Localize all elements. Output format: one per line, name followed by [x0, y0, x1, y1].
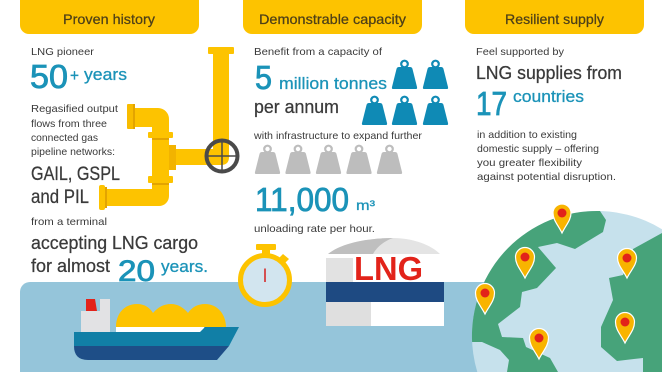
- heading: demonstrable capacity: [243, 0, 422, 34]
- text: in addition: you greater flexibility: [477, 157, 583, 169]
- icon: LNG tank: [326, 238, 444, 326]
- text: LNG pioneer: LNG pioneer: [31, 46, 95, 58]
- label: LNG: LNG: [354, 250, 423, 287]
- text: from a terminal: from a terminal: [31, 216, 107, 228]
- icon: valve wheel: [206, 140, 238, 172]
- stat: almost 20 years: for almost: [31, 256, 110, 276]
- panel: proven history: [20, 0, 238, 288]
- icons: blue weights: [362, 61, 448, 125]
- heading: proven history: [20, 0, 199, 34]
- text: regasified output: Regasified output: [31, 103, 118, 115]
- text: regasified output: connected gas: [31, 132, 98, 144]
- text: unloading rate: unloading rate per hour.: [254, 223, 375, 235]
- stat: 5 million tonnes per annum: million tonnes: [279, 74, 387, 93]
- text: feel supported: Feel supported by: [476, 46, 565, 58]
- icon: LNG ship: [74, 299, 239, 360]
- text: pipeline names: [31, 164, 120, 208]
- panel: demonstrable capacity: [243, 0, 448, 235]
- globe: [472, 211, 662, 372]
- icons: grey weights: [255, 146, 402, 174]
- stat: 5 million tonnes per annum: 5: [255, 59, 272, 96]
- icon: pipeline: [99, 47, 234, 210]
- stat: almost 20 years: 20: [118, 255, 155, 288]
- text: LNG supplies from: LNG supplies from: [476, 62, 622, 83]
- panel: resilient supply: [465, 0, 644, 183]
- text: with infrastructure: with infrastructure to expand further: [253, 130, 423, 142]
- text: benefit: Benefit from a capacity of: [254, 46, 382, 58]
- text: regasified output: [31, 103, 118, 158]
- text: regasified output: pipeline networks:: [31, 146, 115, 158]
- text: in addition: [477, 129, 616, 183]
- sea background: [20, 282, 500, 372]
- stat: almost 20 years: [31, 233, 208, 288]
- location pins: [476, 204, 636, 359]
- stat: 5 million tonnes per annum: [254, 59, 387, 117]
- text: pipeline names: GAIL, GSPL: [31, 164, 120, 185]
- stat: 11,000 m3: 11,000: [255, 181, 349, 218]
- heading: demonstrable capacity: Demonstrable capacity: [259, 11, 406, 27]
- heading: resilient supply: [465, 0, 644, 34]
- stat: 5 million tonnes per annum: per annum: [254, 97, 339, 117]
- text: in addition: against potential disruption.: [477, 171, 616, 183]
- heading: proven history: Proven history: [63, 11, 155, 27]
- stat: 17 countries: countries: [513, 87, 584, 106]
- stat: 17 countries: 17: [476, 85, 507, 122]
- stat: 11,000 m3: m³: [356, 197, 375, 213]
- text: pipeline names: and PIL: [31, 187, 89, 208]
- stat: almost 20 years: accepting LNG cargo: [31, 233, 198, 253]
- icon: stopwatch: [240, 244, 290, 304]
- stat: 50+ years: years: [84, 65, 127, 84]
- text: in addition: in addition to existing: [477, 129, 577, 141]
- stat: 50+ years: [30, 58, 127, 95]
- heading: resilient supply: Resilient supply: [505, 11, 604, 27]
- stat: 50+ years: 50: [30, 58, 68, 95]
- stat: almost 20 years: years.: [161, 257, 208, 276]
- text: in addition: domestic supply – offering: [477, 143, 599, 155]
- text: regasified output: flows from three: [31, 118, 107, 130]
- stat: 50+ years: +: [70, 66, 79, 85]
- stat: 17 countries: [476, 85, 584, 122]
